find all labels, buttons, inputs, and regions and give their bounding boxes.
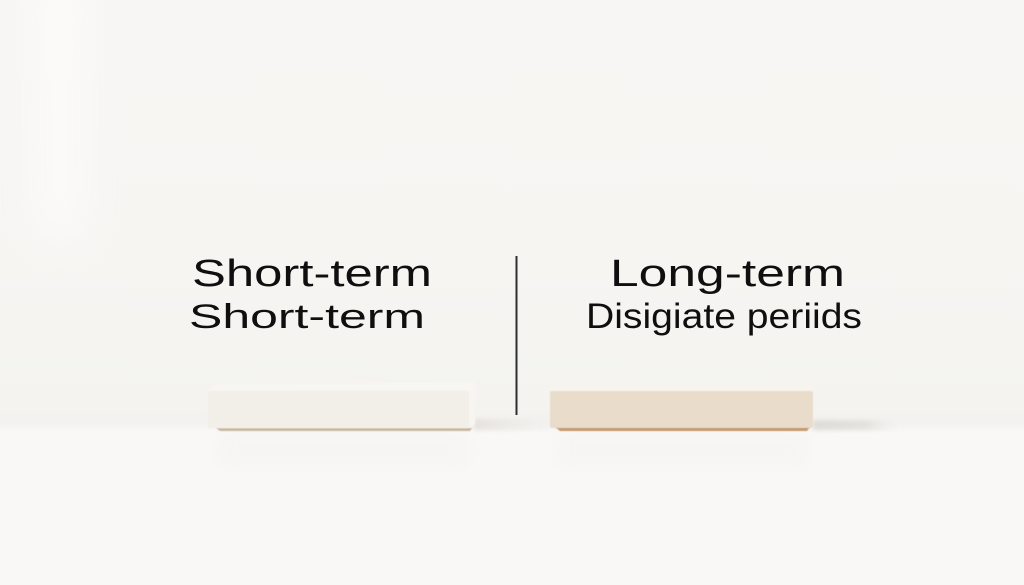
text: short-term repeat: Short-term [189, 298, 425, 336]
divider line [516, 256, 518, 415]
panel: short-term [189, 253, 550, 466]
block: short-term bar [208, 382, 550, 466]
heading: short-term: Short-term [192, 253, 432, 295]
block: long-term bar [550, 385, 901, 466]
text: disigiate periods: Disigiate periids [586, 297, 862, 336]
panel: long-term [550, 253, 901, 466]
heading: long-term: Long-term [610, 253, 845, 295]
